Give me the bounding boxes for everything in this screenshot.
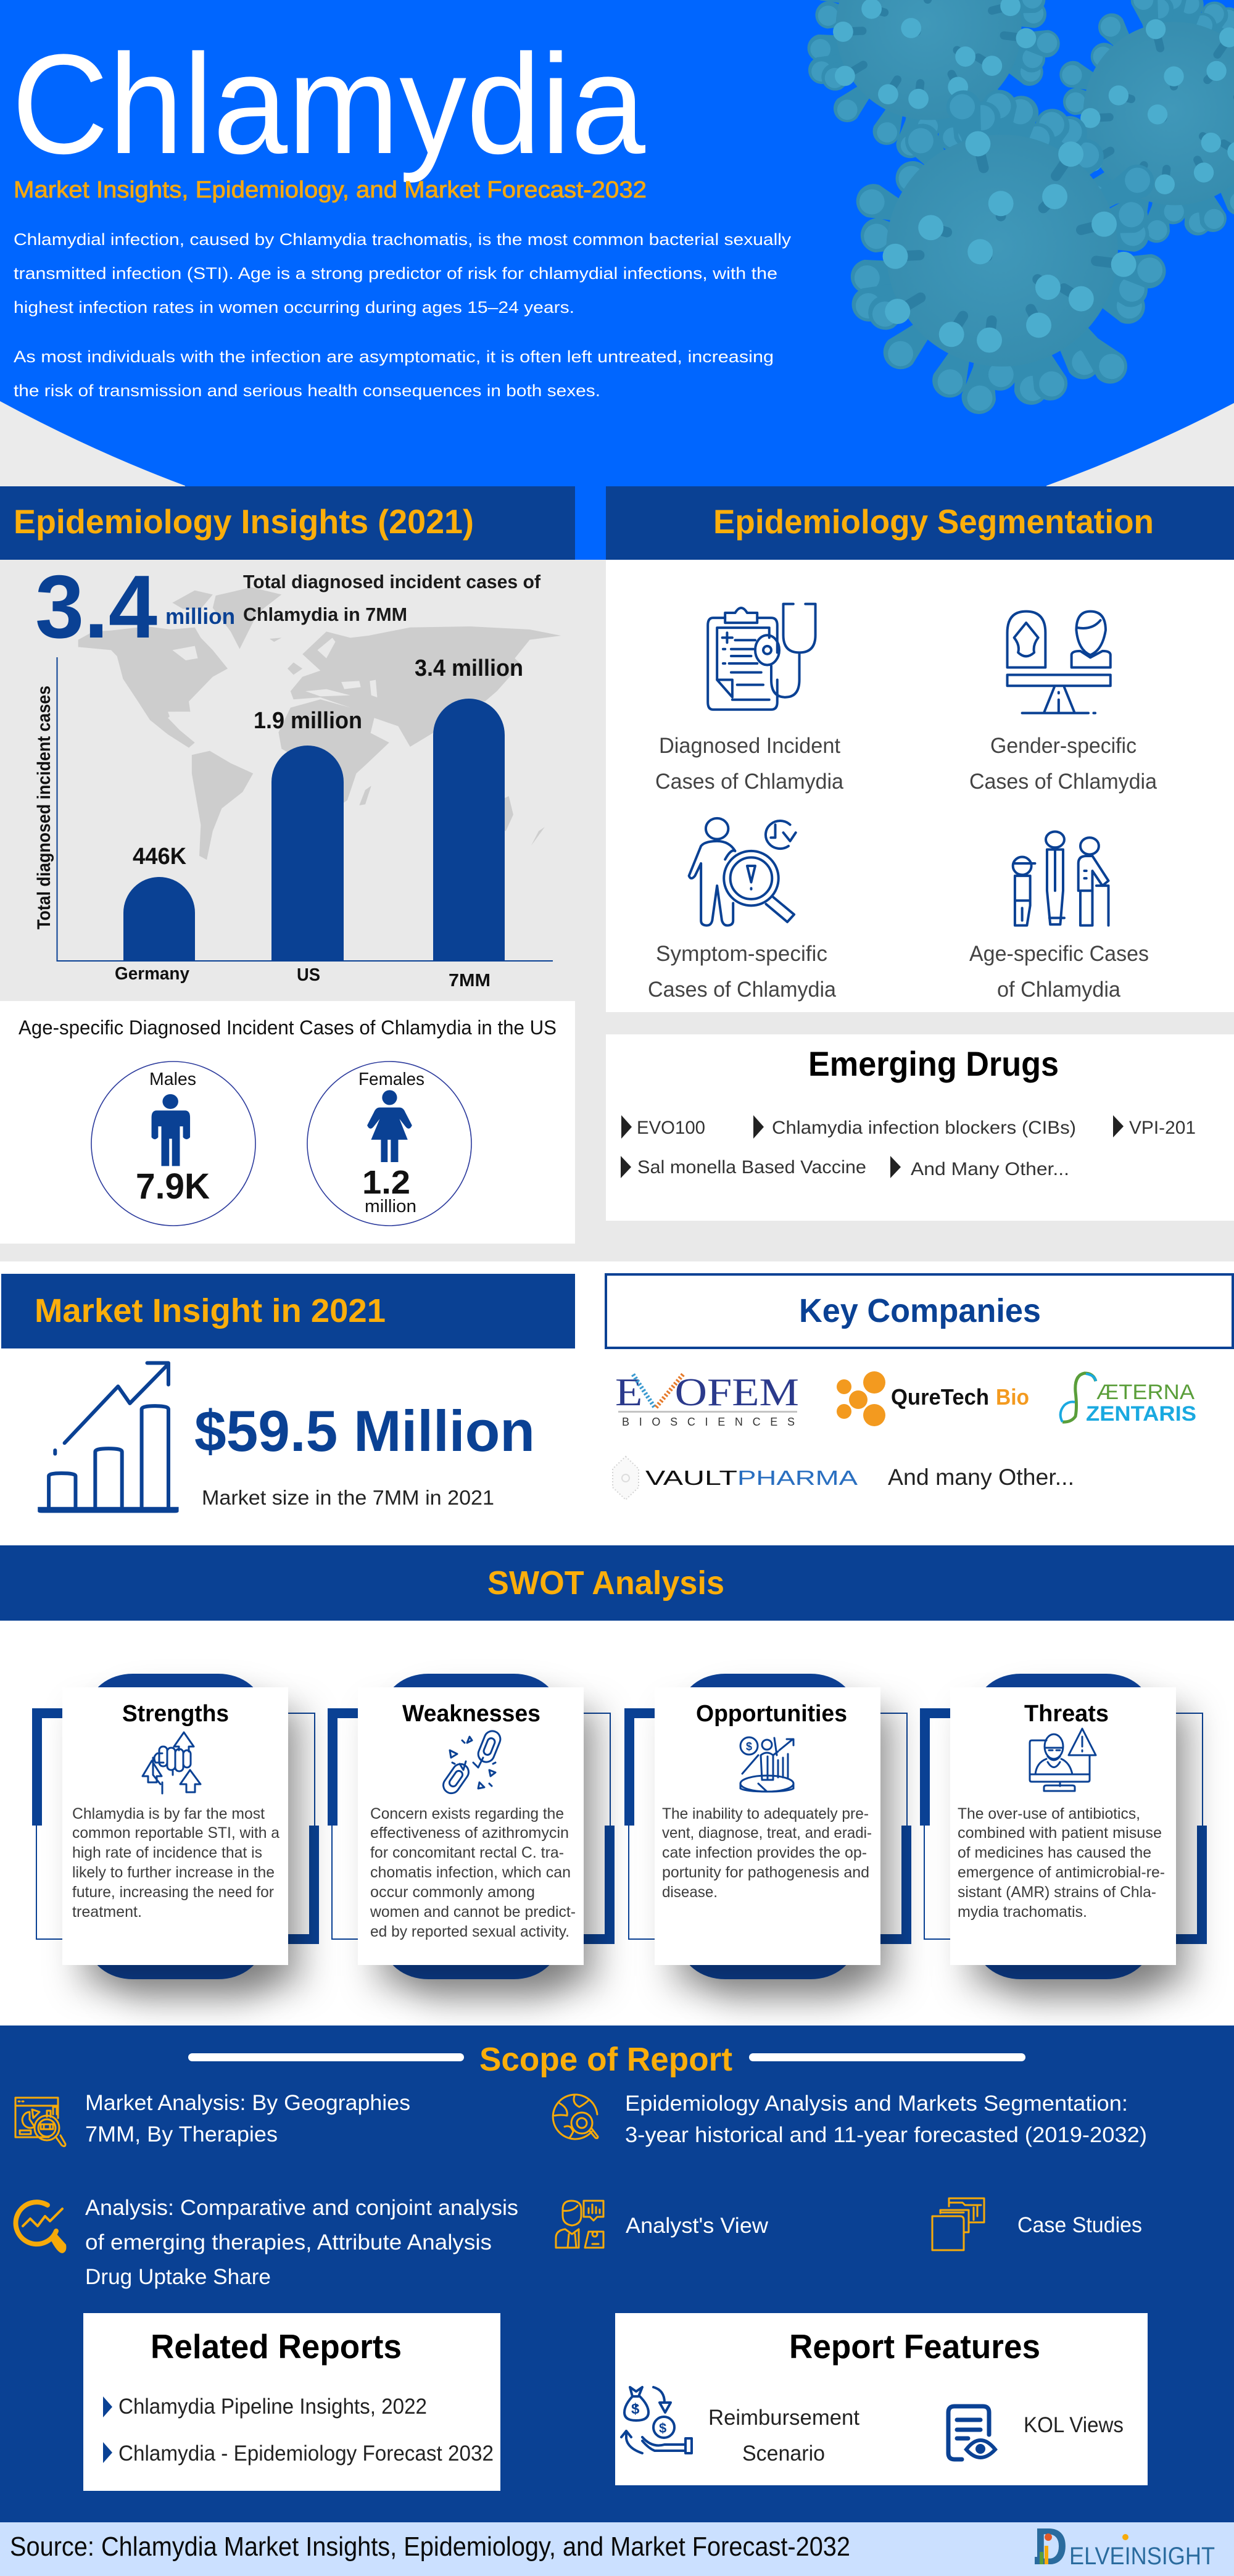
big stat 3.4 million xyxy=(35,557,235,657)
weaknesses text: ed by reported sexual activity. xyxy=(370,1923,569,1940)
icon: opportunity growth: $ xyxy=(746,1740,752,1753)
scope text: market analysis: Market Analysis: By Geographies xyxy=(85,2091,410,2115)
scope text: comparative analysis: of emerging therapies, Attribute Analysis xyxy=(85,2230,492,2254)
drugs heading: Emerging Drugs xyxy=(808,1044,1059,1083)
segment labels: of Chlamydia xyxy=(997,978,1121,1002)
strengths text: Chlamydia is by far the most xyxy=(72,1805,265,1822)
opportunities title: Opportunities xyxy=(696,1701,847,1727)
age panel heading: Age-specific Diagnosed Incident Cases of Chlamydia in the US xyxy=(19,1016,557,1039)
threats text: mydia trachomatis. xyxy=(958,1903,1087,1921)
panel: age-specific cases xyxy=(0,1001,575,1244)
threats text: sistant (AMR) strains of Chla- xyxy=(958,1884,1156,1901)
related report links: Chlamydia - Epidemiology Forecast 2032 xyxy=(118,2441,494,2466)
related report links: Chlamydia Pipeline Insights, 2022 xyxy=(118,2395,427,2419)
world map backdrop xyxy=(78,588,561,860)
icon: analyst xyxy=(556,2201,603,2248)
icon: man xyxy=(152,1094,190,1166)
age panel background xyxy=(0,1001,575,1244)
panel: market insight xyxy=(1,1274,575,1513)
drugs background xyxy=(606,1034,1234,1221)
weaknesses text xyxy=(370,1805,576,1940)
strengths text: likely to further increase in the xyxy=(72,1864,275,1881)
strengths text: common reportable STI, with a xyxy=(72,1824,280,1842)
SWOT card: strengths xyxy=(32,1674,319,1979)
opportunities text: vent, diagnose, treat, and eradi- xyxy=(662,1824,872,1842)
logo: Vault Pharma xyxy=(613,1456,858,1500)
hero grey backdrop xyxy=(0,0,1234,494)
value labels: 1.9 million xyxy=(254,708,362,734)
strengths text: treatment. xyxy=(72,1903,142,1921)
segment labels: Cases of Chlamydia xyxy=(648,978,837,1002)
drug names: And Many Other... xyxy=(911,1159,1069,1179)
females circle xyxy=(307,1062,471,1226)
logo: Vault Pharma: PHARMA xyxy=(737,1466,858,1489)
feature text: KOL views: KOL Views xyxy=(1024,2413,1124,2437)
category labels: Germany xyxy=(115,964,189,984)
opportunities text: cate infection provides the op- xyxy=(662,1844,867,1861)
category labels: US xyxy=(297,965,320,985)
threats text: of medicines has caused the xyxy=(958,1844,1151,1861)
insights heading: Epidemiology Insights (2021) xyxy=(14,502,474,541)
category labels: 7MM xyxy=(449,971,491,991)
icon: globe search xyxy=(553,2095,598,2139)
weaknesses text: effectiveness of azithromycin xyxy=(370,1824,569,1842)
segment labels: Cases of Chlamydia xyxy=(655,770,844,794)
segment labels: Gender-specific xyxy=(990,734,1137,758)
drug names: EVO100 xyxy=(637,1118,705,1138)
icon: rising bar chart xyxy=(38,1363,179,1513)
icon: broken chain xyxy=(440,1729,503,1797)
logo: QureTech Bio: QureTech xyxy=(891,1384,989,1410)
segment labels: Symptom-specific xyxy=(656,942,827,966)
and many others note: And many Other... xyxy=(888,1465,1074,1490)
related report bullets xyxy=(103,2396,112,2463)
market heading: Market Insight in 2021 xyxy=(35,1292,386,1329)
weaknesses text: women and cannot be predict- xyxy=(370,1903,576,1921)
hero blue dome xyxy=(0,0,1234,560)
opportunities text: The inability to adequately pre- xyxy=(662,1805,869,1822)
scope text: case studies: Case Studies xyxy=(1017,2213,1142,2237)
panel: report features xyxy=(615,2313,1148,2485)
segment labels: Age-specific Cases xyxy=(969,942,1149,966)
scope text: epidemiology analysis: Epidemiology Analysis and Markets Segmentation: xyxy=(625,2092,1128,2116)
panel: related reports xyxy=(83,2313,500,2491)
strengths text: high rate of incidence that is xyxy=(72,1844,262,1861)
companies heading: Key Companies xyxy=(799,1292,1041,1329)
y axis title: Total diagnosed incident cases xyxy=(34,686,54,929)
icon: KOL document and eye xyxy=(948,2406,995,2459)
weaknesses text: occur commonly among xyxy=(370,1884,535,1901)
opportunities text xyxy=(662,1805,872,1901)
logo: QureTech Bio: Bio xyxy=(996,1384,1029,1410)
threats text xyxy=(958,1805,1165,1921)
value labels: 446K xyxy=(133,844,187,870)
scope text: analyst view: Analyst's View xyxy=(626,2214,769,2238)
drug names: Chlamydia infection blockers (CIBs) xyxy=(772,1118,1076,1138)
weaknesses title: Weaknesses xyxy=(402,1701,540,1727)
bar chart xyxy=(34,655,553,991)
threats text: The over-use of antibiotics, xyxy=(958,1805,1140,1822)
grey section background xyxy=(0,560,1234,1261)
related reports heading: Related Reports xyxy=(151,2327,402,2366)
bar: Germany xyxy=(123,877,195,961)
SWOT card: weaknesses xyxy=(328,1674,615,1979)
icon: reimbursement xyxy=(621,2387,692,2453)
strengths text: future, increasing the need for xyxy=(72,1884,274,1901)
scope text: epidemiology analysis: 3-year historical and 11-year forecasted (2019-2032) xyxy=(625,2123,1147,2147)
market header bar xyxy=(1,1274,575,1348)
stat description: Total diagnosed incident cases of xyxy=(243,571,541,592)
drug names: Sal monella Based Vaccine xyxy=(637,1157,866,1178)
scope left rule xyxy=(188,2053,464,2061)
scope text: market analysis: 7MM, By Therapies xyxy=(85,2122,278,2146)
bar: US xyxy=(271,746,344,961)
icon: threat monitor xyxy=(1030,1729,1096,1791)
scope text: comparative analysis: Drug Uptake Share xyxy=(85,2265,271,2289)
related report links xyxy=(118,2395,494,2466)
category labels xyxy=(115,964,491,991)
scope right rule xyxy=(749,2053,1025,2061)
icon: strengths fist and arrows xyxy=(143,1732,201,1793)
subtitle: Market Insights, Epidemiology, and Market Forecast-2032 xyxy=(14,177,647,203)
scope text: comparative analysis xyxy=(85,2196,518,2289)
weaknesses text: Concern exists regarding the xyxy=(370,1805,564,1822)
opportunities text: disease. xyxy=(662,1884,718,1901)
icon: opportunity growth xyxy=(740,1737,793,1792)
icon: reimbursement: $ xyxy=(631,2401,640,2417)
panel: epidemiology segmentation xyxy=(606,486,1234,1012)
companies header box xyxy=(606,1274,1233,1348)
panel: scope of report xyxy=(0,2025,1234,2522)
intro paragraph one: transmitted infection (STI). Age is a strong predictor of risk for chlamydial infections, with the xyxy=(14,264,777,283)
opportunities text: portunity for pathogenesis and xyxy=(662,1864,869,1881)
panel: key companies xyxy=(606,1274,1233,1500)
icon: clipboard and stethoscope xyxy=(708,604,816,710)
value labels xyxy=(133,655,523,870)
logo: QureTech Bio xyxy=(837,1371,1029,1426)
stat description: Chlamydia in 7MM xyxy=(243,604,407,625)
drug names: VPI-201 xyxy=(1129,1118,1196,1138)
logo: Vault Pharma: VAULT xyxy=(645,1466,737,1489)
icon: symptom magnifier xyxy=(689,818,796,925)
big stat 3.4 million: 3.4 xyxy=(35,557,157,657)
source citation: Source: Chlamydia Market Insights, Epidemiology, and Market Forecast-2032 xyxy=(10,2532,850,2562)
stat description xyxy=(243,571,541,625)
females circle: million xyxy=(365,1197,416,1216)
report features heading: Report Features xyxy=(789,2327,1040,2366)
hero section xyxy=(0,0,1234,560)
weaknesses text: chomatis infection, which can xyxy=(370,1864,571,1881)
segmentation heading: Epidemiology Segmentation xyxy=(713,502,1154,541)
males circle: 7.9K xyxy=(136,1166,210,1207)
segment labels xyxy=(648,734,1157,1002)
feature text: reimbursement: Reimbursement xyxy=(708,2406,859,2430)
SWOT heading: SWOT Analysis xyxy=(487,1564,724,1602)
segment labels: Diagnosed Incident xyxy=(659,734,840,758)
intro paragraph two xyxy=(14,347,774,400)
value labels: 3.4 million xyxy=(415,655,523,681)
strengths title: Strengths xyxy=(122,1701,229,1727)
SWOT card: threats xyxy=(920,1674,1207,1979)
insights header bar xyxy=(0,486,575,560)
logo: DelveInsight: D xyxy=(1034,2517,1067,2575)
bar: 7MM xyxy=(433,699,505,961)
logo: Evofem: BIOSCIENCES xyxy=(622,1416,795,1428)
scope text: comparative analysis: Analysis: Comparative and conjoint analysis xyxy=(85,2196,518,2220)
logo: Aeterna Zentaris: ÆTERNA xyxy=(1096,1381,1195,1404)
logo: DelveInsight: ELVEINSIGHT xyxy=(1069,2543,1215,2570)
panel: SWOT heading band xyxy=(0,1545,1234,1621)
feature text: reimbursement xyxy=(708,2406,859,2466)
intro paragraph one: Chlamydial infection, caused by Chlamydia trachomatis, is the most common bacterial sexually xyxy=(14,230,792,249)
source footer xyxy=(0,2517,1234,2576)
scope text: market analysis xyxy=(85,2091,410,2146)
icon: reimbursement: $ xyxy=(659,2420,666,2436)
intro paragraph one xyxy=(14,230,792,317)
males circle: Males xyxy=(149,1070,196,1089)
intro paragraph two: the risk of transmission and serious health consequences in both sexes. xyxy=(14,381,600,400)
SWOT card: opportunities xyxy=(624,1674,911,1979)
threats text: combined with patient misuse xyxy=(958,1824,1162,1842)
logo: Evofem xyxy=(615,1371,799,1428)
females circle: 1.2 xyxy=(362,1164,410,1201)
main title: Chlamydia xyxy=(12,25,645,183)
chart axes xyxy=(57,657,553,961)
icon: analysis magnifier xyxy=(16,2202,66,2253)
threats text: emergence of antimicrobial-re- xyxy=(958,1864,1165,1881)
market value: $59.5 Million xyxy=(194,1398,535,1463)
segmentation header bar xyxy=(606,486,1234,560)
scope background xyxy=(0,2025,1234,2522)
big stat 3.4 million: million xyxy=(165,604,235,629)
weaknesses text: for concomitant rectal C. tra- xyxy=(370,1844,564,1861)
strengths text xyxy=(72,1805,280,1921)
scope heading: Scope of Report xyxy=(479,2041,732,2078)
intro paragraph two: As most individuals with the infection are asymptomatic, it is often left untreated, increasing xyxy=(14,347,774,366)
logo: Aeterna Zentaris: ZENTARIS xyxy=(1086,1402,1196,1426)
drug names xyxy=(637,1118,1196,1179)
icon: woman xyxy=(367,1090,412,1162)
threats title: Threats xyxy=(1024,1701,1109,1727)
virus illustration xyxy=(804,0,1234,417)
drug bullet markers xyxy=(621,1115,1124,1178)
scope text: epidemiology analysis xyxy=(625,2092,1147,2147)
intro paragraph one: highest infection rates in women occurring during ages 15–24 years. xyxy=(14,298,574,317)
panel: emerging drugs xyxy=(606,1034,1234,1221)
icon: market analysis dashboard xyxy=(15,2098,65,2146)
icon: age group people xyxy=(1013,832,1109,925)
logo: Evofem: EVOFEM xyxy=(615,1371,799,1414)
icon: gender balance xyxy=(1008,612,1111,713)
feature text: reimbursement: Scenario xyxy=(742,2441,825,2466)
segment labels: Cases of Chlamydia xyxy=(969,770,1157,794)
males circle xyxy=(91,1062,255,1226)
females circle: Females xyxy=(358,1070,424,1089)
icon: case study folders xyxy=(932,2198,984,2250)
market caption: Market size in the 7MM in 2021 xyxy=(202,1486,494,1509)
logo: Aeterna Zentaris xyxy=(1061,1373,1196,1426)
logo: DelveInsight xyxy=(1034,2517,1215,2575)
segmentation background xyxy=(606,559,1234,1012)
panel: epidemiology insights xyxy=(0,486,575,991)
